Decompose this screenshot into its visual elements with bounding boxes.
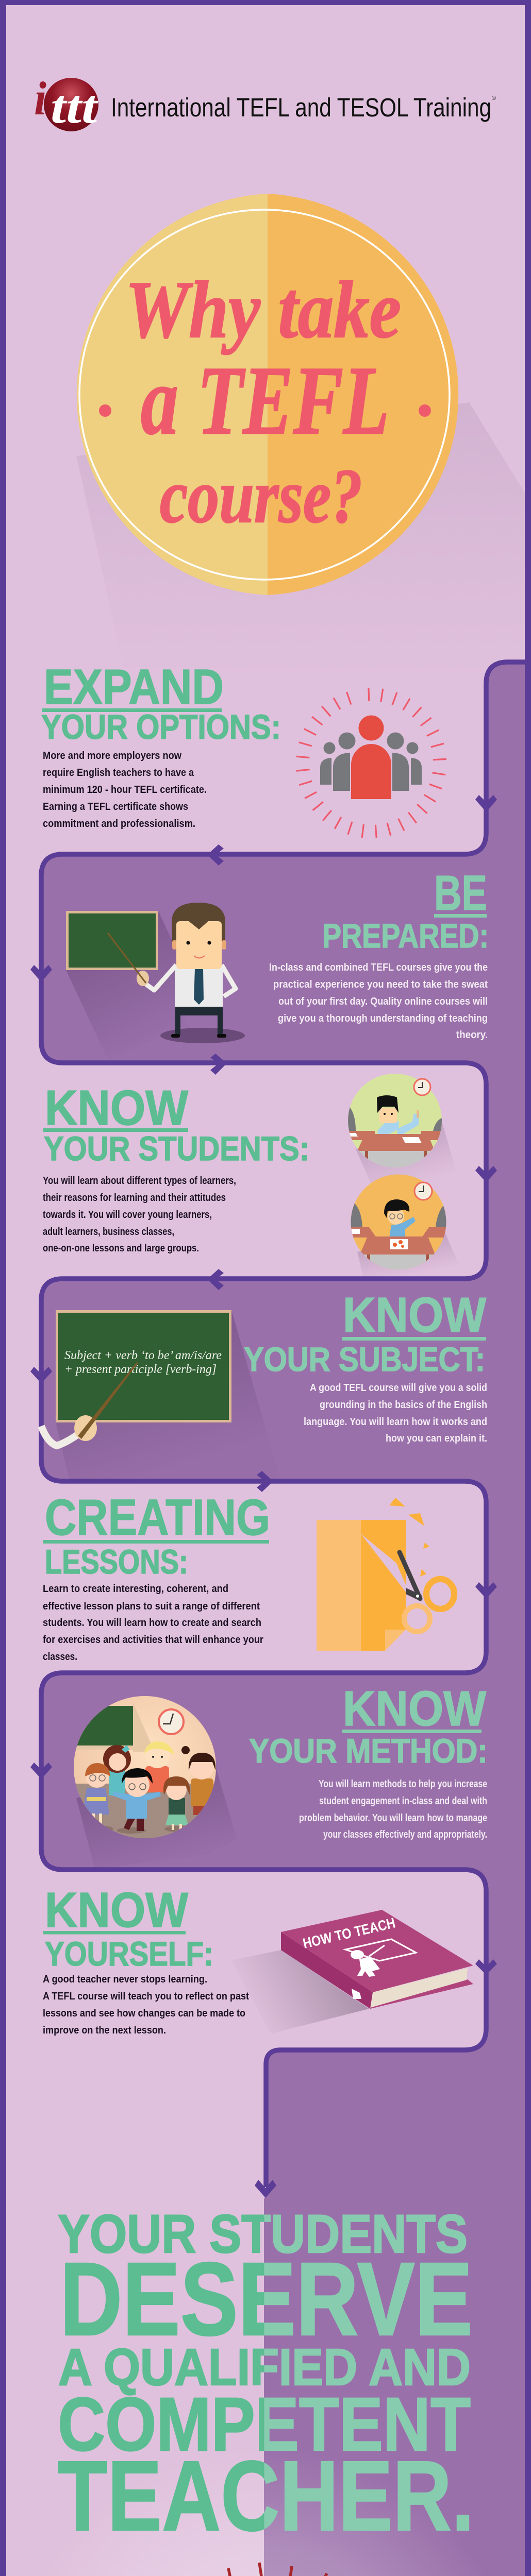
section: expand your options [41,659,446,838]
heading: BE [434,866,487,921]
chalk text: + present participle [verb-ing] [64,1363,217,1376]
winding path line [41,662,525,2187]
heading: YOUR SUBJECT: [244,1340,485,1378]
title badge [77,194,458,595]
child: ginger girl with glasses [84,1763,110,1824]
illustration: how to teach book [230,1910,473,2033]
heading [41,659,281,747]
heading [322,866,489,955]
heading: CREATING [45,1489,270,1546]
rays [98,2563,437,2576]
heading: KNOW [343,1287,486,1343]
badge left half [77,194,268,595]
body text: one-on-one lessons and large groups. [43,1243,199,1254]
heading: YOUR STUDENTS: [44,1129,309,1167]
illustration: student raising hand, green [348,1074,453,1182]
body text: theory. [456,1029,488,1041]
heading [43,1489,270,1581]
logo [34,72,496,133]
body text [43,1175,236,1254]
closing statement: COMPETENT [58,2382,471,2467]
section: know your students [43,1074,461,1278]
heading: YOURSELF: [45,1935,213,1973]
section: know your subject [41,1287,487,1481]
body text: Earning a TEFL certificate shows [43,801,188,812]
section: creating lessons [43,1489,454,1663]
body text: More and more employers now [43,750,181,761]
heading: KNOW [45,1080,188,1136]
body text: A TEFL course will teach you to reflect on past [43,1991,249,2002]
body text: effective lesson plans to suit a range of different [43,1601,260,1612]
body text: give you a thorough understanding of teaching [278,1013,488,1024]
heading: KNOW [45,1883,188,1938]
body text: practical experience you need to take the sweat [273,979,488,990]
heading: YOUR METHOD: [249,1732,488,1770]
path arrows [30,795,497,2198]
closing statement [58,2204,474,2551]
body text: grounding in the basics of the English [320,1399,487,1411]
body text: A good teacher never stops learning. [43,1974,207,1985]
child: red-haired girl [103,1745,131,1795]
body text [43,1974,249,2036]
heading [244,1287,486,1378]
icon: people with rays [296,688,446,838]
heading: PREPARED: [322,917,489,955]
heading [43,1883,213,1973]
section: be prepared [66,866,489,1060]
body text: adult learners, business classes, [43,1226,174,1238]
body text: language. You will learn how it works and [304,1416,487,1428]
body text: require English teachers to have a [43,767,194,778]
heading [43,1080,309,1167]
clock [414,1182,432,1200]
body text: A good TEFL course will give you a solid [310,1382,487,1394]
section: know your method [74,1690,487,1859]
title text: a TEFL [141,347,389,455]
body text: minimum 120 - hour TEFL certificate. [43,784,207,795]
logo: i [34,72,46,125]
body text: classes. [43,1651,77,1663]
body text [43,1583,263,1663]
logo: ttt [51,80,98,133]
body text: your classes effectively and appropriately. [323,1829,487,1840]
child: blond boy [144,1741,174,1792]
heading: YOUR OPTIONS: [41,708,281,747]
illustration: student raising hand, orange [351,1175,461,1278]
illustration: paper and scissors [317,1498,454,1651]
illustration: classroom of children [72,1696,237,1869]
chalk text: Subject + verb ‘to be’ am/is/are [64,1349,222,1362]
body text: student engagement in-class and deal with [319,1795,487,1807]
body text: In-class and combined TEFL courses give you the [269,962,488,973]
heading: EXPAND [44,659,224,715]
title text: Why take [125,265,401,355]
heading: LESSONS: [45,1543,188,1581]
child: girl in green shirt [163,1776,190,1830]
lower glow [6,2452,525,2576]
body text: commitment and professionalism. [43,818,195,829]
body text: how you can explain it. [386,1433,487,1444]
body text: out of your first day. Quality online courses will [278,996,488,1007]
title text: course? [160,453,362,539]
body text [269,962,488,1041]
badge right half [268,194,458,595]
body text: problem behavior. You will learn how to manage [299,1812,487,1824]
child: dark-haired girl [181,1746,215,1815]
clock [414,1079,430,1095]
purple winding panel [41,662,525,2576]
title circle long shadow [76,402,525,675]
closing statement: YOUR STUDENTS [58,2204,468,2264]
logo: © [492,95,496,101]
body text: their reasons for learning and their attitudes [43,1192,226,1204]
body text: towards it. You will cover young learners, [43,1209,212,1221]
title text [125,265,401,539]
heading [249,1681,488,1770]
body text [43,750,207,829]
body text: You will learn methods to help you increase [319,1778,487,1790]
illustration: chalkboard with grammar rule [41,1310,281,1481]
child: boy in blue shirt [112,1768,161,1831]
body text: improve on the next lesson. [43,2025,166,2036]
body text: You will learn about different types of learners, [43,1175,236,1187]
body text: students. You will learn how to create and search [43,1617,261,1629]
chalk text [64,1349,222,1376]
clock [159,1709,184,1734]
body text: for exercises and activities that will enhance your [43,1634,263,1646]
logo ball [44,78,98,131]
body text: Learn to create interesting, coherent, and [43,1583,228,1595]
section: know yourself [43,1883,473,2036]
illustration: how to teach book: HOW TO TEACH [301,1914,397,1952]
illustration: teacher at chalkboard [66,903,245,1060]
body text [304,1382,487,1444]
body text: lessons and see how changes can be made to [43,2008,245,2019]
heading: KNOW [343,1681,486,1736]
body text [299,1778,487,1840]
award rosette [227,2563,328,2576]
closing statement: A QUALIFIED AND [58,2338,471,2396]
